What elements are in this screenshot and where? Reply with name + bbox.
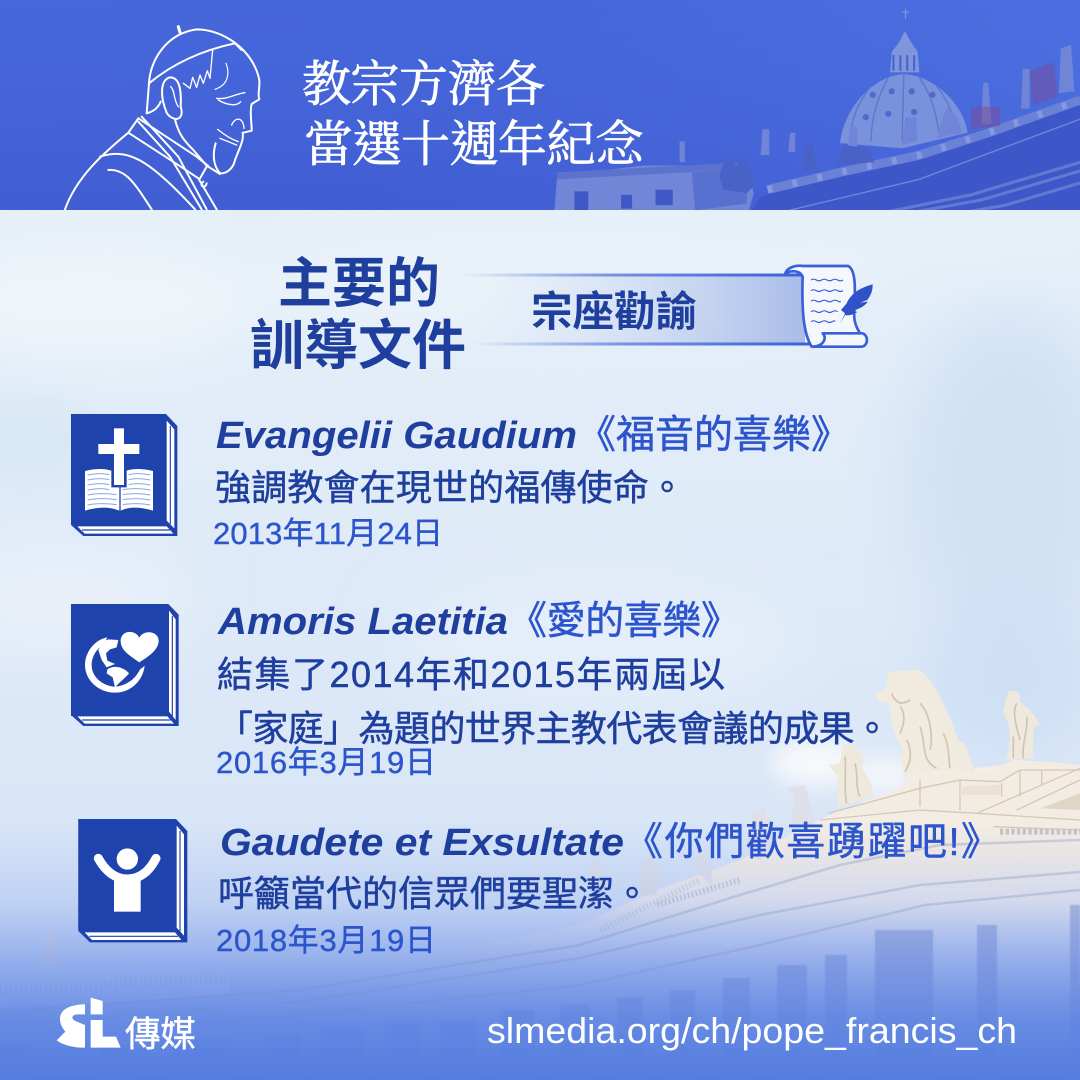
entry 2 title: Amoris Laetitia	[217, 601, 508, 643]
heading: main teaching documents: 主要的	[278, 254, 440, 314]
banner: apostolic exhortations with scroll	[460, 266, 873, 347]
colonnade mass	[0, 765, 1080, 1080]
bottom blue fade	[0, 820, 1080, 1080]
entry 2 title: 《愛的喜樂》	[508, 600, 740, 643]
distant statues	[42, 785, 815, 968]
icon: scroll and quill	[785, 266, 873, 347]
logo: SL media	[57, 998, 196, 1054]
entry 1 title: 《福音的喜樂》	[577, 414, 850, 457]
left balustrade	[0, 971, 230, 1008]
icon: book with raised-arms person	[78, 819, 187, 942]
entry 2 date: 2016年3月19日	[216, 745, 436, 780]
header band	[0, 0, 1080, 217]
entry 2: Amoris Laetitia	[71, 600, 890, 780]
icon: book with globe and heart	[71, 604, 179, 726]
banner label: 宗座勸諭	[531, 288, 697, 335]
logo wordmark: 傳媒	[125, 1014, 196, 1054]
entry 3: Gaudete et Exsultate	[78, 819, 1000, 958]
entry 1 description: 強調教會在現世的福傳使命。	[215, 467, 685, 508]
icon: book with cross	[71, 414, 177, 536]
entry 3 date: 2018年3月19日	[216, 923, 436, 958]
entry 2 description: 結集了2014年和2015年兩屆以	[217, 654, 725, 695]
icon: Pope Francis line portrait	[65, 27, 259, 209]
entry 3 title: 《你們歡喜踴躍吧!》	[624, 821, 1000, 864]
photo: St Peter's colonnade with statues	[0, 670, 1080, 1080]
entry 2 description: 「家庭」為題的世界主教代表會議的成果。	[217, 708, 890, 749]
entry 3 description: 呼籲當代的信眾們要聖潔。	[218, 873, 650, 914]
heading: main teaching documents: 訓導文件	[250, 316, 466, 376]
colonnade shadows between columns	[0, 905, 1080, 1080]
entry 1 date: 2013年11月24日	[213, 516, 443, 551]
title: 教宗方濟各	[302, 57, 545, 112]
header photo: St Peter's Basilica dome and colonnade	[554, 9, 1080, 217]
roofline statues and attic	[820, 670, 1080, 832]
website url: slmedia.org/ch/pope_francis_ch	[487, 1010, 1017, 1051]
entry 3 title: Gaudete et Exsultate	[220, 822, 624, 864]
title: 當選十週年紀念	[304, 117, 644, 172]
entry 1: Evangelii Gaudium	[71, 414, 850, 551]
entry 1 title: Evangelii Gaudium	[216, 415, 577, 457]
icon: SL cross monogram	[57, 998, 121, 1048]
cornice bands	[0, 840, 1080, 1036]
